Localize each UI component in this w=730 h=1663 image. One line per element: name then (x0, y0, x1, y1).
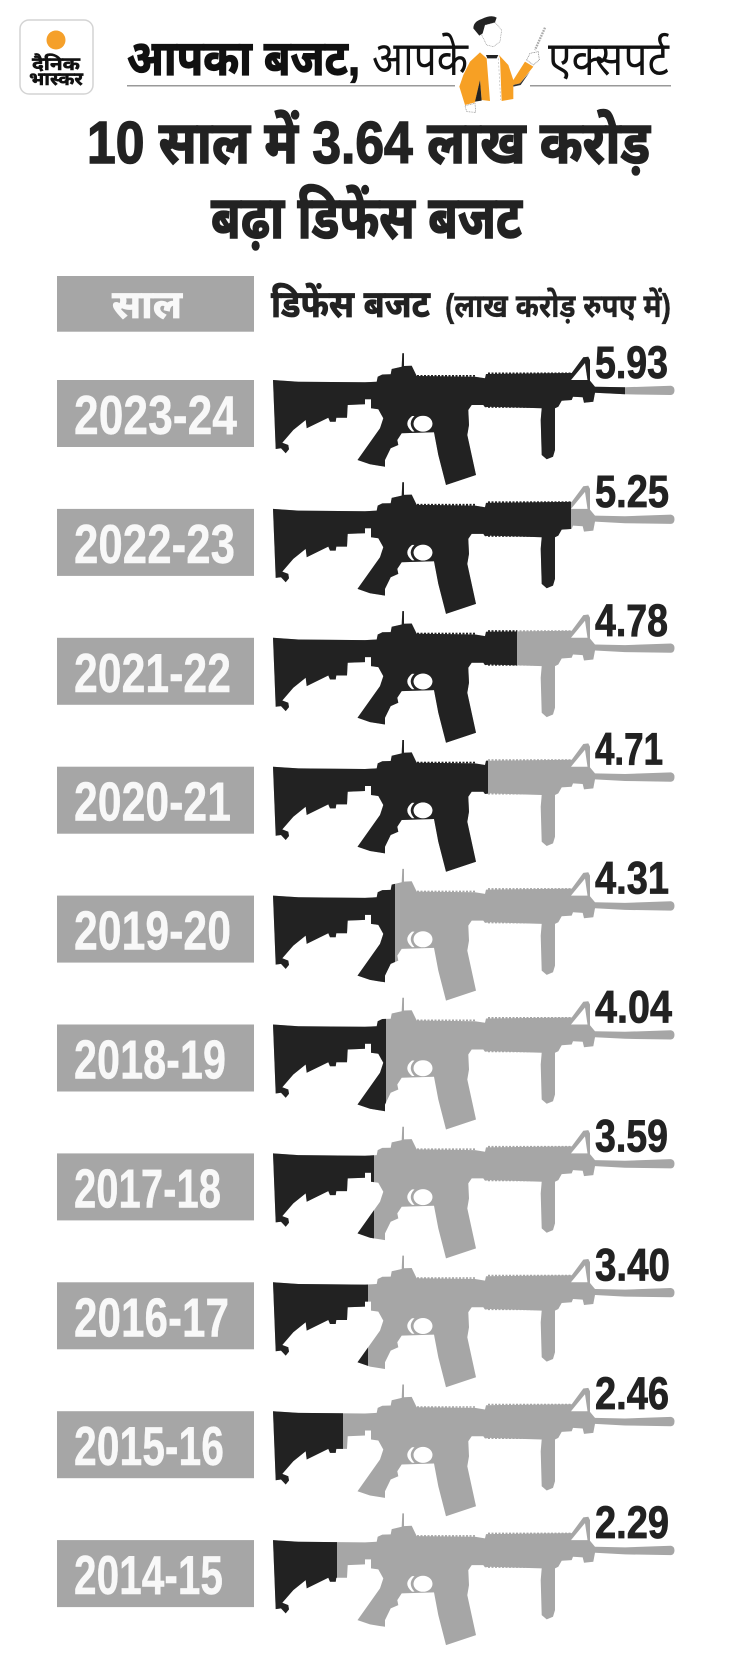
logo: Dainik Bhaskar: भास्कर (29, 69, 84, 89)
row: 2016-17 (57, 1239, 674, 1387)
row: 2023-24: 2023-24 (74, 384, 237, 446)
title: बढ़ा डिफेंस बजट (211, 185, 523, 251)
row: 2018-19: 2018-19 (74, 1028, 226, 1090)
row: 2022-23: 5.25 (595, 466, 669, 517)
row: 2015-16 (57, 1368, 674, 1516)
row: 2018-19 (57, 982, 674, 1130)
row: 2014-15 (57, 1497, 674, 1645)
row: 2017-18: 2017-18 (74, 1157, 221, 1219)
row: 2015-16: 2015-16 (74, 1415, 224, 1477)
title: 10 साल में 3.64 लाख करोड़ (87, 110, 651, 176)
row: 2021-22 (57, 595, 674, 743)
row: 2022-23 (57, 466, 674, 614)
table header: year (57, 276, 254, 332)
row: 2016-17: 3.40 (595, 1239, 670, 1290)
row: 2017-18: 3.59 (595, 1110, 668, 1161)
row: 2020-21: 4.71 (595, 724, 663, 775)
row: 2021-22: 2021-22 (74, 642, 231, 704)
row: 2016-17: 2016-17 (74, 1286, 229, 1348)
row: 2023-24 (57, 337, 674, 485)
row: 2015-16: 2.46 (595, 1368, 669, 1419)
row: 2023-24: 5.93 (595, 337, 668, 388)
logo: Dainik Bhaskar: दैनिक (32, 53, 81, 74)
heading: series title: एक्सपर्ट (548, 32, 670, 85)
row: 2019-20: 4.31 (595, 853, 669, 904)
row: 2021-22: 4.78 (595, 595, 668, 646)
row: 2017-18 (57, 1110, 674, 1258)
icon: expert with pointer (459, 16, 545, 112)
heading: series title: आपके (372, 32, 469, 85)
table header: defence budget: डिफेंस बजट (271, 282, 430, 326)
table header: defence budget: (लाख करोड़ रुपए में) (445, 287, 671, 324)
row: 2022-23: 2022-23 (74, 513, 235, 575)
row: 2020-21: 2020-21 (74, 771, 231, 833)
row: 2014-15: 2.29 (595, 1497, 669, 1548)
logo: Dainik Bhaskar (20, 20, 93, 94)
table header: defence budget (271, 282, 671, 326)
row: 2020-21 (57, 724, 674, 872)
row: 2014-15: 2014-15 (74, 1544, 223, 1606)
table header: year: साल (112, 284, 183, 327)
row: 2019-20 (57, 853, 674, 1001)
row: 2018-19: 4.04 (595, 982, 672, 1032)
row: 2019-20: 2019-20 (74, 900, 231, 962)
heading: series title: आपका बजट, (127, 32, 360, 86)
heading: series title (127, 32, 671, 86)
title (87, 110, 651, 251)
